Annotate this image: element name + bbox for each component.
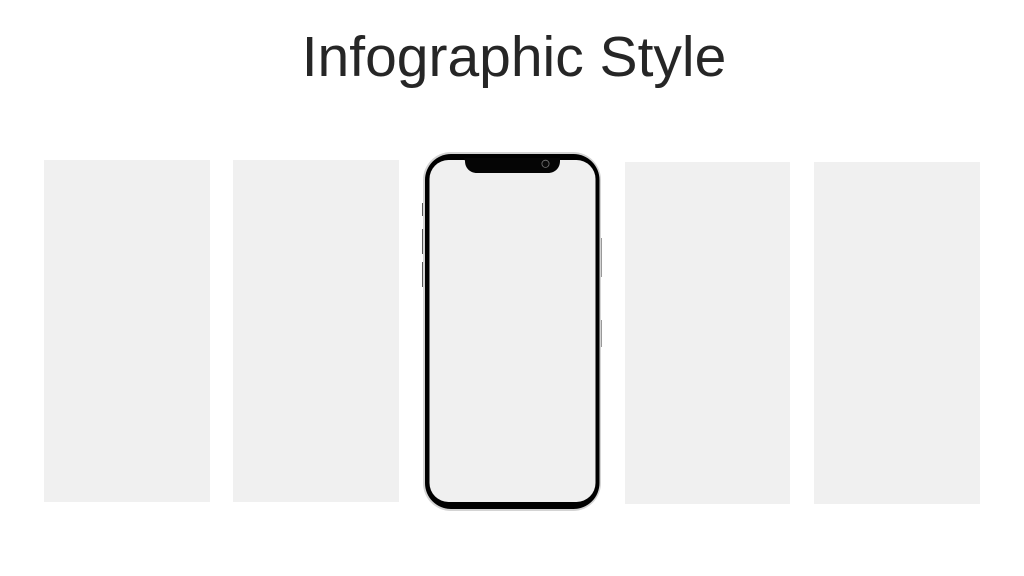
title: Infographic Style [302, 25, 726, 89]
phone notch [464, 158, 560, 173]
panel: card 4 [625, 162, 790, 504]
phone black bezel [425, 154, 600, 509]
phone screen [430, 160, 596, 502]
panel: card 1 [44, 160, 210, 502]
phone outer frame [423, 152, 601, 511]
phone camera [542, 160, 549, 167]
panel: card 2 [233, 160, 399, 502]
phone side buttons [422, 203, 602, 347]
panel: card 5 [814, 162, 980, 504]
